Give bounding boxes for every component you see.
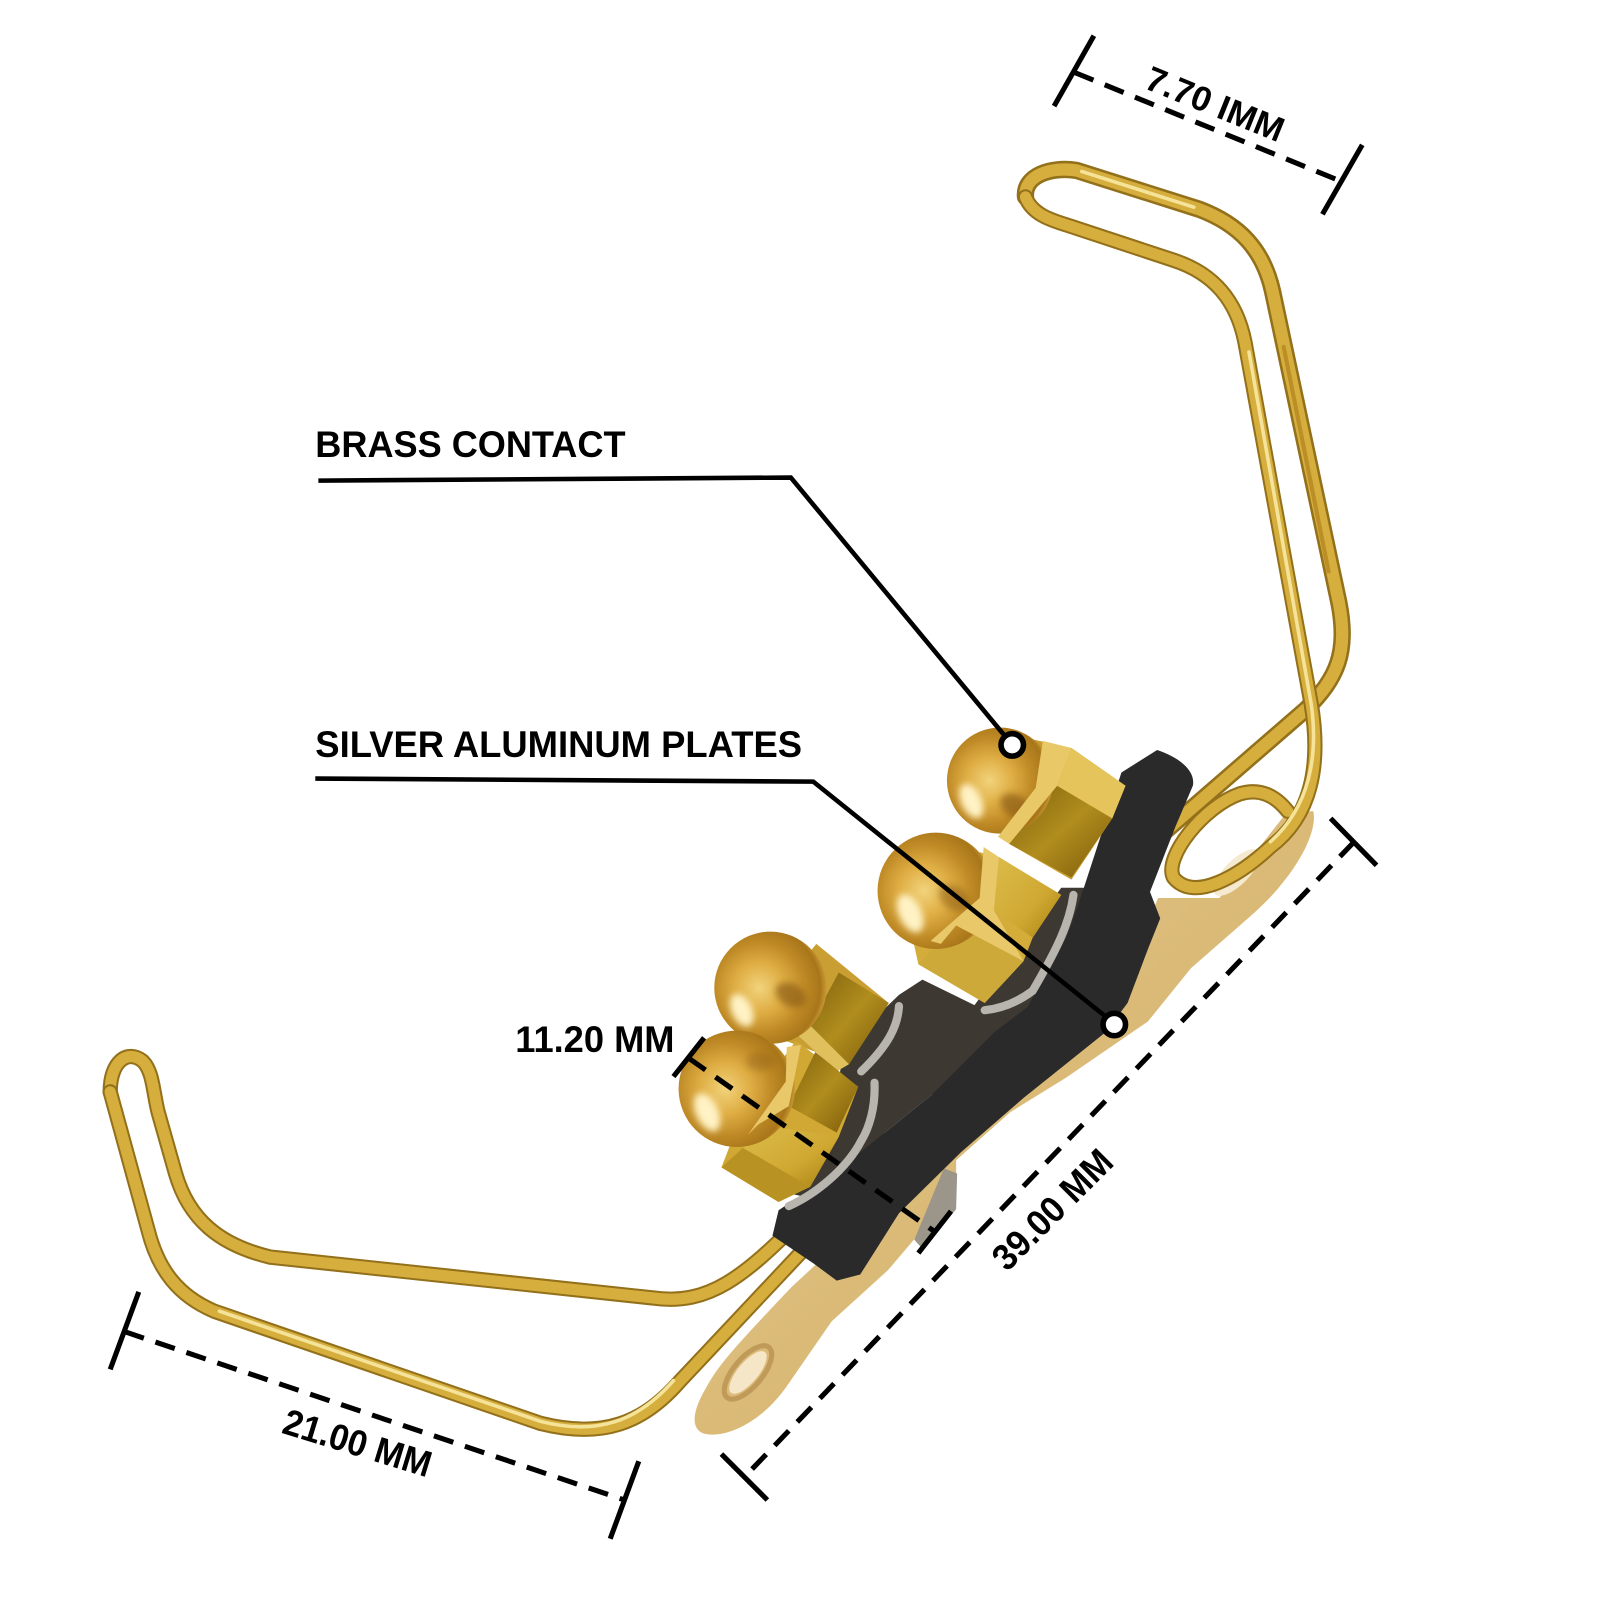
wire: bottom left upper xyxy=(110,1057,801,1299)
dimension: 11.20 mm: 11.20 MM xyxy=(515,1019,674,1060)
callout label: brass contact: BRASS CONTACT xyxy=(315,424,626,465)
nut: fourth xyxy=(679,1031,858,1202)
dimension: 11.20 mm xyxy=(515,1019,951,1253)
nut: third xyxy=(714,932,889,1071)
marker dot: brass contact xyxy=(1001,734,1023,756)
callout: silver aluminum plates xyxy=(315,724,1126,1036)
dimension: 21.00 mm: 21.00 MM xyxy=(278,1401,437,1485)
dimension: 39.00 mm: 39.00 MM xyxy=(984,1141,1121,1278)
rubber: black insulating strip xyxy=(772,750,1193,1281)
nut: top xyxy=(947,728,1126,880)
plate: brass base plate xyxy=(695,811,1314,1435)
rubber: back shadow section xyxy=(791,888,1087,1199)
washers: silver aluminum plates xyxy=(789,895,1073,1206)
product: brass contact photo illustration xyxy=(110,169,1342,1435)
dimension: 21.00 mm xyxy=(110,1292,639,1539)
callout: brass contact xyxy=(315,424,1023,756)
marker dot: silver aluminum plates xyxy=(1103,1013,1126,1036)
leader line: brass contact xyxy=(318,478,1012,745)
dimension: 7.70 mm xyxy=(1054,36,1362,214)
dimension: 7.70 mm: 7.70 IMM xyxy=(1140,60,1289,150)
wire: bottom left lower xyxy=(110,1092,806,1429)
dimension: 39.00 mm xyxy=(721,818,1377,1500)
wire: top right rear xyxy=(1025,169,1342,842)
wire: top right front xyxy=(1026,197,1315,888)
callout label: silver aluminum plates: SILVER ALUMINUM PLATES xyxy=(315,724,802,765)
nut: second xyxy=(878,833,1061,1003)
leader line: silver aluminum plates xyxy=(315,779,1114,1023)
